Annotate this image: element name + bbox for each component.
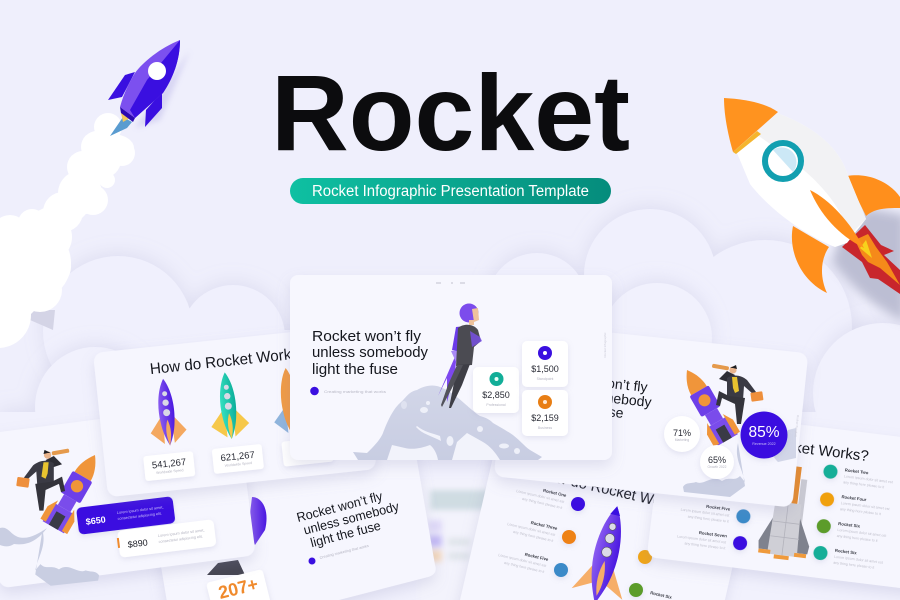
- heading: light the fuse: [309, 518, 382, 550]
- circle: 85%: Revenue 2022: [752, 442, 776, 446]
- nodes and labels, left column: [554, 497, 652, 597]
- heading: [312, 329, 429, 378]
- rocket one: [145, 377, 188, 447]
- circle: 65%: [700, 445, 734, 479]
- label text: Lorem ipsum dolor sit amet est: [516, 489, 565, 504]
- rocket and man: [16, 447, 108, 586]
- label text: any thing here please to it: [504, 561, 545, 574]
- circle: 65%: Growth 2022: [708, 465, 727, 469]
- heading: Rocket won’t fly: [549, 369, 648, 395]
- stat: 541,267: [143, 451, 195, 481]
- stat card: 2,159: Business: [538, 426, 552, 430]
- circle: 71%: 71%: [673, 428, 691, 438]
- labels: Rocket Three: [530, 520, 558, 531]
- purple rocket partly hidden: [248, 497, 267, 545]
- heading: How do Rocket Work: [149, 346, 292, 378]
- side label: Rocket Infographic: [603, 332, 607, 358]
- labels: [698, 451, 870, 556]
- subtitle pill: [290, 178, 611, 204]
- smoke right: [772, 428, 796, 462]
- label text: any thing here please to it: [513, 530, 554, 543]
- stat: hidden third: [281, 437, 334, 467]
- label: 890: consectetur adipiscing elit.: [158, 535, 203, 544]
- heading: light the fuse: [544, 397, 625, 421]
- description text: Lorem ipsum dolor sit amet est: [677, 534, 726, 544]
- labels: [524, 488, 567, 562]
- heading: [295, 485, 404, 552]
- description text: any thing here please to it: [840, 507, 881, 516]
- top dots: [436, 282, 465, 284]
- caption: Creating marketing that works: [319, 544, 369, 560]
- description text: Lorem ipsum dolor sit amet est: [834, 555, 883, 565]
- label: rocket six: Rocket Six: [650, 590, 673, 600]
- label: 650: [76, 496, 176, 535]
- label: 890: Lorem ipsum dolor sit amet,: [158, 528, 205, 538]
- labels: Rocket Five: [524, 552, 549, 562]
- rocket three: [269, 367, 300, 436]
- label text: Lorem ipsum dolor sit amet est: [507, 522, 556, 537]
- smoke tendrils: [0, 528, 47, 546]
- description text: Lorem ipsum dolor sit amet est: [840, 501, 890, 511]
- labels: Rocket Four: [841, 494, 867, 502]
- panel: slide, how do rocket work (left): [93, 325, 377, 497]
- smoke cloud: [353, 386, 542, 460]
- description text: any thing here please to it: [833, 561, 874, 570]
- stat card: 1,500: [522, 341, 568, 387]
- heading: light the fuse: [312, 362, 398, 378]
- dark figure wedge: [207, 560, 245, 575]
- background clouds, back layer: [43, 209, 860, 600]
- panel: slide, rocket won't fly (bottom left): [150, 439, 436, 600]
- label text: [498, 489, 565, 574]
- check icon: [308, 558, 316, 564]
- panel: slide, how do rocket (bottom centre): [454, 440, 748, 600]
- stat card: 2,850: [473, 367, 519, 413]
- heading: [542, 369, 652, 421]
- labels: Rocket Six: [838, 521, 861, 529]
- description text: Lorem ipsum dolor sit amet est: [680, 508, 730, 518]
- description text: any thing here please to it: [836, 534, 878, 543]
- check icon: [310, 387, 319, 395]
- label: 650: consectetur adipiscing elit.: [117, 512, 162, 521]
- stat: 541,267: 541,267: [151, 457, 187, 471]
- heading: unless somebody: [312, 345, 429, 361]
- shuttle: [757, 463, 819, 562]
- rocket two: [206, 370, 251, 441]
- heading: Rocket won’t fly: [295, 488, 384, 525]
- stat card: 1,500: $1,500: [531, 364, 559, 374]
- stat card: 2,850: $2,850: [482, 390, 510, 400]
- labels: Rocket Seven: [699, 530, 728, 539]
- astronaut figure: [438, 304, 482, 408]
- heading: Rocket won’t fly: [312, 329, 422, 345]
- description text: Lorem ipsum dolor sit amet est: [844, 474, 893, 484]
- heading: How do Rocket Works?: [712, 429, 870, 465]
- labels: Rocket Five: [706, 504, 731, 512]
- background clouds, front layer: [0, 283, 900, 600]
- stat card: 207+: [206, 569, 272, 600]
- center rocket: [569, 500, 643, 600]
- heading: unless somebody: [542, 383, 652, 410]
- description text: [676, 455, 893, 571]
- stat card: 1,500: Standpoint: [537, 377, 553, 381]
- circle: 71%: [664, 416, 700, 452]
- smoke shadow wedge: [28, 310, 55, 330]
- caption: Creating marketing that works: [324, 389, 386, 394]
- label text: Lorem ipsum dolor sit amet est: [498, 553, 547, 568]
- description text: any thing here please to it: [688, 515, 729, 524]
- title: Rocket: [271, 52, 630, 173]
- labels: Rocket Two: [844, 467, 869, 475]
- vertical side label: Rocket Template: [794, 415, 800, 438]
- panel: main slide: [290, 275, 612, 460]
- nodes: [732, 454, 838, 561]
- description text: any thing here please to it: [843, 480, 884, 489]
- panel: slide, how do rocket works (right): [647, 408, 900, 593]
- circle: 65%: 65%: [708, 455, 726, 465]
- label: 650: $650: [85, 515, 106, 527]
- label text: any thing here please to it: [522, 497, 563, 510]
- labels: Rocket One: [542, 488, 567, 498]
- description text: any thing here please to it: [684, 541, 726, 550]
- stat card: 2,159: [522, 390, 568, 436]
- heading: How do Rocket Work: [537, 465, 675, 513]
- stat: 541,267: Worldwide Speed: [156, 468, 184, 475]
- smoke trail: [0, 113, 135, 348]
- panel: slide, percentages (right): [494, 322, 808, 508]
- circle: 71%: Marketing: [675, 438, 689, 442]
- stat card: 2,159: $2,159: [531, 413, 559, 423]
- stat card: 2,850: Professional: [486, 403, 506, 407]
- circle: 85%: 85%: [748, 424, 780, 441]
- rocket and man: [674, 362, 763, 497]
- description text: Lorem ipsum dolor sit amet est: [837, 528, 886, 538]
- stat: 621,267: [212, 444, 264, 474]
- stat: 621,267: Worldwide Speed: [225, 461, 252, 468]
- label: 890: [116, 519, 217, 558]
- label: 650: Lorem ipsum dolor sit amet,: [117, 505, 164, 515]
- blurred background slide: [418, 480, 508, 600]
- label: 890: $890: [127, 537, 148, 550]
- icon: orange rocket: [724, 98, 900, 322]
- labels: Rocket Six: [835, 548, 858, 556]
- heading: unless somebody: [302, 498, 401, 538]
- subtitle pill: Rocket Infographic Presentation Template: [312, 183, 589, 200]
- circle: 85%: [740, 412, 788, 458]
- stat: 621,267: 621,267: [220, 450, 255, 464]
- panel: slide, telescope man (left): [0, 401, 256, 588]
- icon: purple rocket: [108, 40, 190, 136]
